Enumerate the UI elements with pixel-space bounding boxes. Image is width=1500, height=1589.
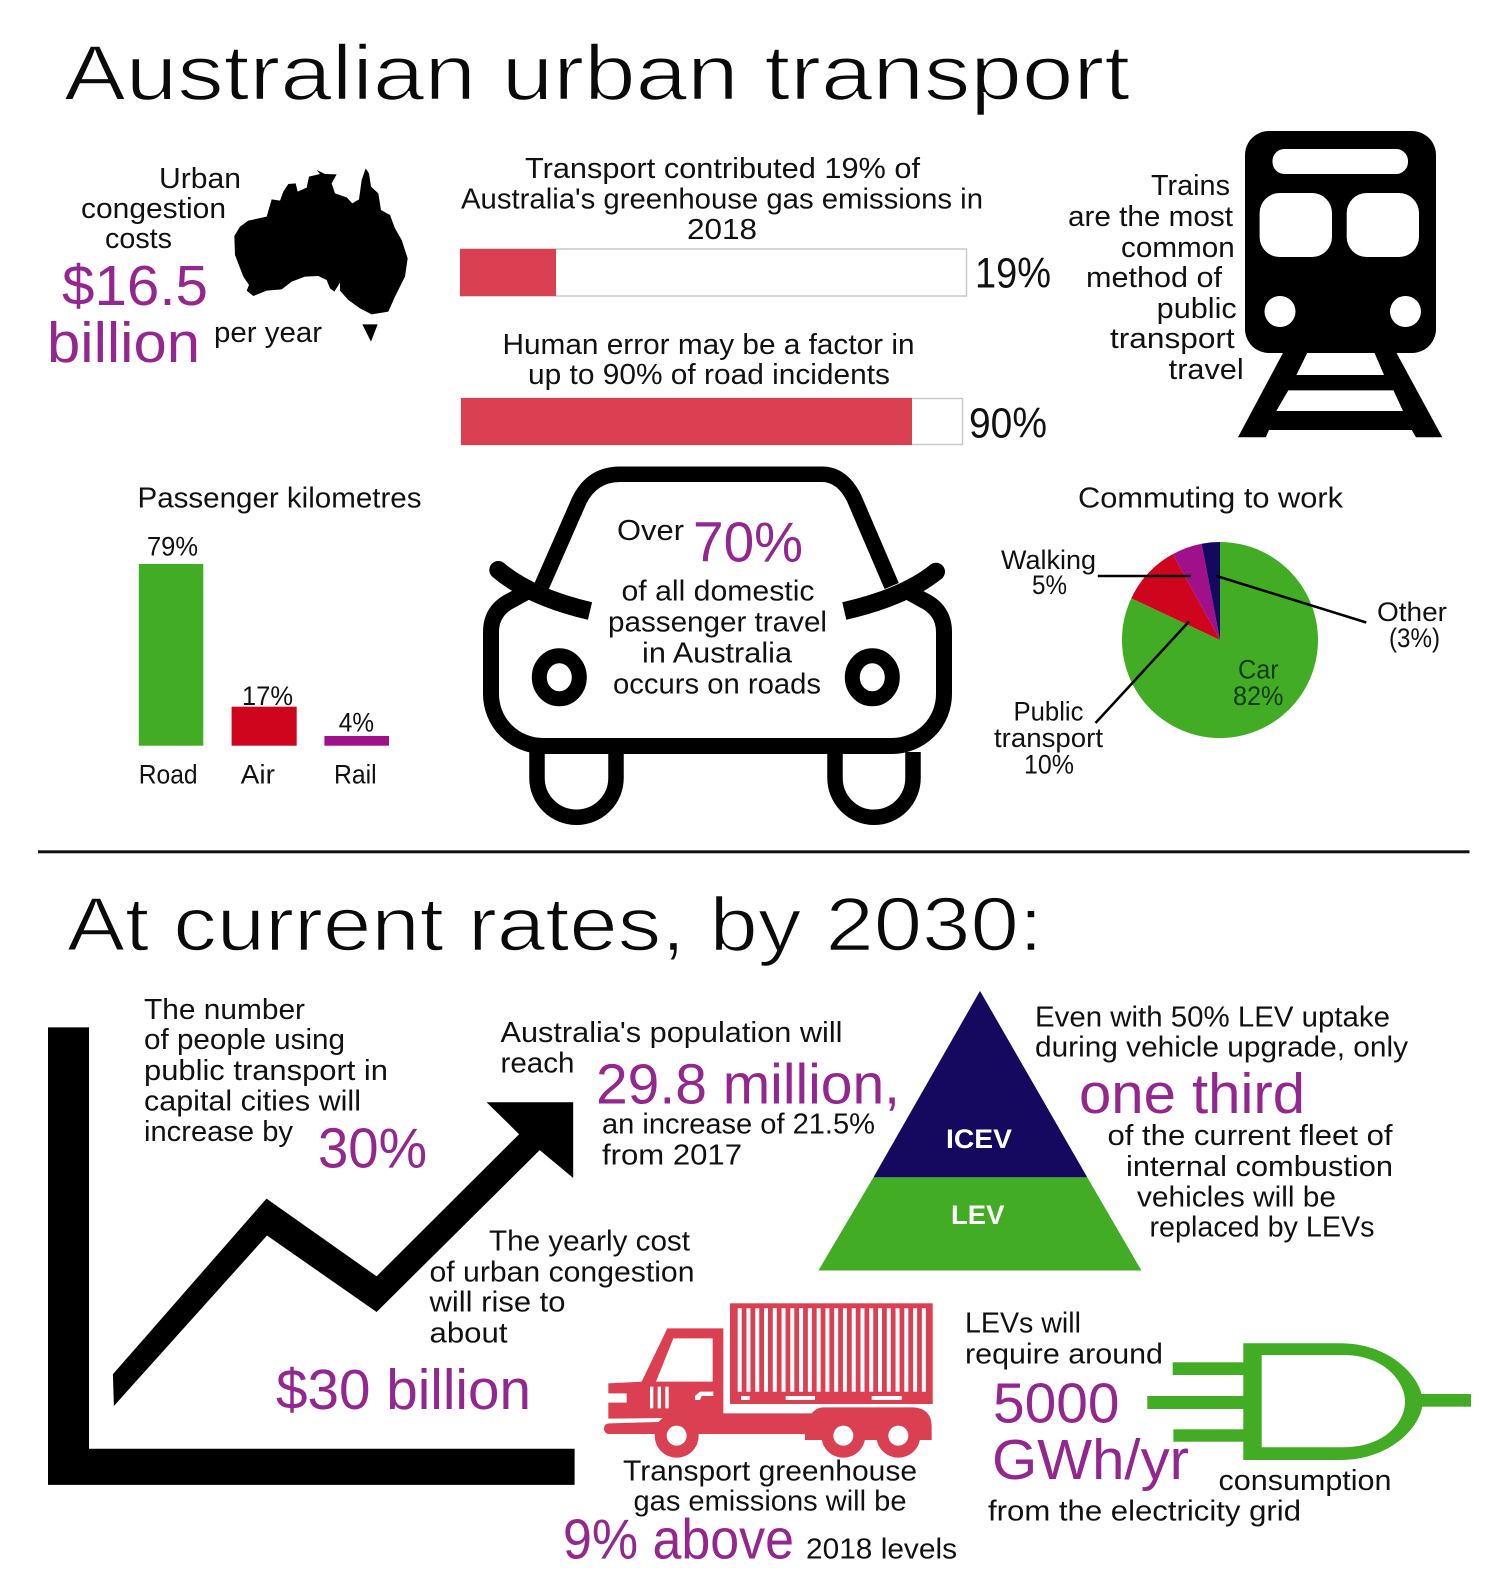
label: other: [1377, 597, 1447, 653]
panel: congestion cost: [47, 163, 408, 375]
text: 70% on roads: Over: [617, 515, 684, 547]
text: urban congestion costs: billion: [47, 311, 200, 375]
icon: truck: [604, 1303, 933, 1458]
bar: road 79%: Road: [139, 759, 198, 789]
text: congestion cost 2030: The yearly cost: [489, 1225, 690, 1257]
label: LEV: LEV: [951, 1200, 1004, 1230]
panel: ICEV and LEV triangle: [818, 991, 1141, 1270]
label: public transport: Public: [1014, 697, 1084, 727]
text: urban congestion costs: Urban: [159, 163, 241, 195]
label: car: Car: [1238, 654, 1279, 684]
leader lines: [1096, 576, 1366, 723]
icon: train: [1238, 131, 1442, 437]
text: trains statement: public: [1157, 293, 1237, 325]
text: congestion cost 2030: of urban congestion: [430, 1256, 694, 1288]
label: car: 82%: [1233, 681, 1284, 711]
text: LEV electricity consumption: require around: [965, 1339, 1163, 1371]
text: population: an increase of 21.5%: [602, 1108, 875, 1140]
value: 90%: 90%: [969, 400, 1047, 448]
text: one third: internal combustion: [1126, 1151, 1393, 1183]
pie chart: [1122, 542, 1318, 738]
label: public transport: transport: [994, 723, 1103, 753]
icon: rising line chart: [48, 1027, 575, 1485]
text: urban congestion costs: per year: [214, 317, 322, 349]
bar: air 17%: [232, 681, 297, 789]
text: emissions 2030: 9% above: [563, 1508, 794, 1572]
bar: 90%: [461, 398, 962, 445]
text: 70% on roads: [608, 511, 827, 700]
text: public transport users: capital cities will: [144, 1086, 361, 1118]
text: one third: [1035, 1002, 1409, 1244]
text: LEV electricity consumption: [965, 1308, 1392, 1528]
text: emissions statement: Australia's greenhouse gas emissions in: [461, 184, 983, 216]
text: congestion cost 2030: $30 billion: [276, 1358, 531, 1422]
triangle: LEV: [818, 1177, 1141, 1270]
label: other: (3%): [1389, 623, 1440, 653]
chart heading: Commuting to work: [1078, 482, 1344, 514]
text: human error statement: up to 90% of road incidents: [528, 359, 890, 391]
text: population: from 2017: [602, 1140, 742, 1172]
panel: road travel car: [489, 474, 945, 817]
text: 70% on roads: of all domestic: [622, 576, 814, 608]
label: car: [1233, 654, 1284, 711]
text: public transport users: 30%: [318, 1116, 427, 1180]
triangle: ICEV: [873, 991, 1087, 1177]
text: LEV electricity consumption: consumption: [1218, 1465, 1392, 1497]
text: LEV electricity consumption: from the electricity grid: [988, 1496, 1301, 1528]
icon: car: [489, 474, 945, 817]
label: walking: [1001, 545, 1096, 600]
text: population: [500, 1017, 900, 1172]
text: emissions statement: Transport contributed 19% of: [525, 153, 921, 185]
title: Australian urban transport: [64, 28, 1130, 116]
bar: rail 4%: 4%: [339, 708, 374, 738]
text: one third: Even with 50% LEV uptake: [1035, 1002, 1390, 1034]
text: one third: replaced by LEVs: [1150, 1212, 1374, 1244]
text: urban congestion costs: $16.5: [62, 254, 208, 318]
text: trains statement: [1068, 170, 1244, 386]
text: population: 29.8 million,: [596, 1052, 900, 1116]
text: trains statement: transport: [1110, 323, 1235, 355]
icon: map of Australia: [234, 168, 408, 342]
text: population: reach: [500, 1047, 574, 1079]
bar: road 79%: [139, 532, 203, 789]
text: urban congestion costs: [47, 163, 322, 375]
label: public transport: [994, 697, 1103, 780]
label: public transport: 10%: [1024, 750, 1074, 780]
text: public transport users: The number: [144, 994, 305, 1026]
text: 70% on roads: 70%: [693, 511, 803, 575]
panel: human error bar: [461, 329, 1047, 448]
text: trains statement: are the most: [1068, 201, 1233, 233]
panel: greenhouse emissions bar: [460, 153, 1051, 298]
label: walking: 5%: [1032, 570, 1067, 600]
text: LEV electricity consumption: LEVs will: [965, 1308, 1081, 1340]
text: public transport users: public transport in: [144, 1055, 388, 1087]
bar: 19%: [460, 249, 966, 296]
text: trains statement: method of: [1086, 262, 1223, 294]
label: walking: Walking: [1001, 545, 1096, 575]
text: trains statement: travel: [1169, 354, 1244, 386]
text: human error statement: Human error may be a factor in: [502, 329, 914, 361]
text: population: Australia's population will: [500, 1017, 842, 1049]
text: emissions statement: [461, 153, 983, 246]
bar: rail 4%: [324, 708, 389, 789]
text: public transport users: increase by: [144, 1116, 293, 1148]
text: trains statement: Trains: [1151, 170, 1230, 202]
text: emissions statement: 2018: [687, 214, 757, 246]
text: LEV electricity consumption: GWh/yr: [992, 1428, 1189, 1492]
text: emissions 2030: [563, 1456, 957, 1572]
text: human error statement: [502, 329, 914, 391]
text: congestion cost 2030: [276, 1225, 694, 1422]
label: ICEV: ICEV: [946, 1124, 1012, 1154]
text: public transport users: of people using: [144, 1024, 345, 1056]
text: public transport users: [144, 994, 427, 1180]
text: one third: one third: [1079, 1062, 1305, 1126]
text: congestion cost 2030: about: [430, 1318, 508, 1350]
bar: road 79%: 79%: [147, 532, 198, 562]
text: urban congestion costs: costs: [105, 223, 172, 255]
value: 19%: 19%: [975, 250, 1051, 298]
text: congestion cost 2030: will rise to: [428, 1286, 566, 1318]
text: emissions 2030: 2018 levels: [806, 1534, 957, 1566]
text: 70% on roads: occurs on roads: [613, 668, 821, 700]
chart heading: Passenger kilometres: [138, 483, 422, 515]
panel: commuting to work pie: [994, 482, 1447, 780]
text: 70% on roads: in Australia: [642, 638, 793, 670]
icon: plug: [1147, 1343, 1471, 1460]
label: other: Other: [1377, 597, 1447, 627]
text: trains statement: common: [1121, 232, 1235, 264]
bar: air 17%: 17%: [242, 681, 293, 711]
heading: by 2030: At current rates, by 2030:: [67, 883, 1043, 968]
panel: passenger kilometres chart: [138, 483, 422, 789]
text: emissions 2030: gas emissions will be: [634, 1486, 906, 1518]
text: 70% on roads: passenger travel: [608, 607, 827, 639]
text: urban congestion costs: congestion: [81, 193, 226, 225]
text: one third: vehicles will be: [1137, 1181, 1336, 1213]
text: emissions 2030: Transport greenhouse: [623, 1456, 917, 1488]
bar: air 17%: Air: [241, 759, 275, 789]
text: LEV electricity consumption: 5000: [993, 1372, 1120, 1436]
text: one third: of the current fleet of: [1108, 1120, 1394, 1152]
bar: rail 4%: Rail: [334, 759, 377, 789]
text: one third: during vehicle upgrade, only: [1035, 1032, 1409, 1064]
panel: trains: [1068, 131, 1442, 437]
